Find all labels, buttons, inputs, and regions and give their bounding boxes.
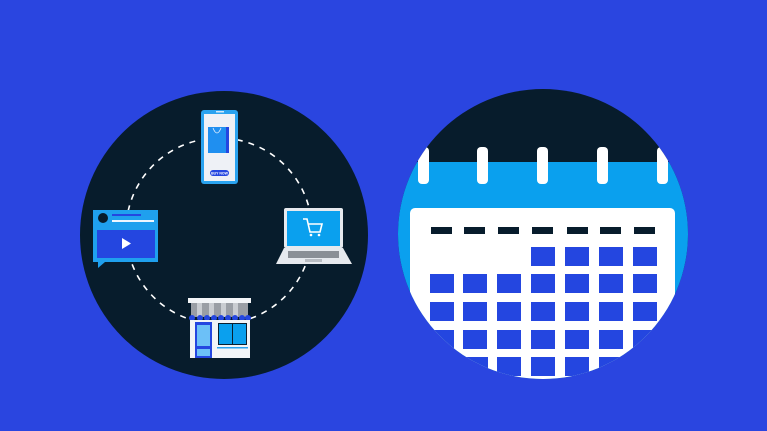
icon: phone with shopping bag: BUY NOW <box>211 172 229 176</box>
icon: video card <box>93 210 158 268</box>
icon: laptop with cart <box>276 208 352 264</box>
calendar card <box>410 208 675 379</box>
date grid <box>430 247 657 376</box>
calendar header band <box>390 162 700 385</box>
calendar rings <box>418 147 668 184</box>
panel: omnichannel circle <box>80 91 368 379</box>
icon: phone with shopping bag <box>201 110 238 184</box>
dashed ring <box>126 138 312 324</box>
panel: calendar circle <box>398 89 688 379</box>
icon: shop front <box>188 298 251 358</box>
